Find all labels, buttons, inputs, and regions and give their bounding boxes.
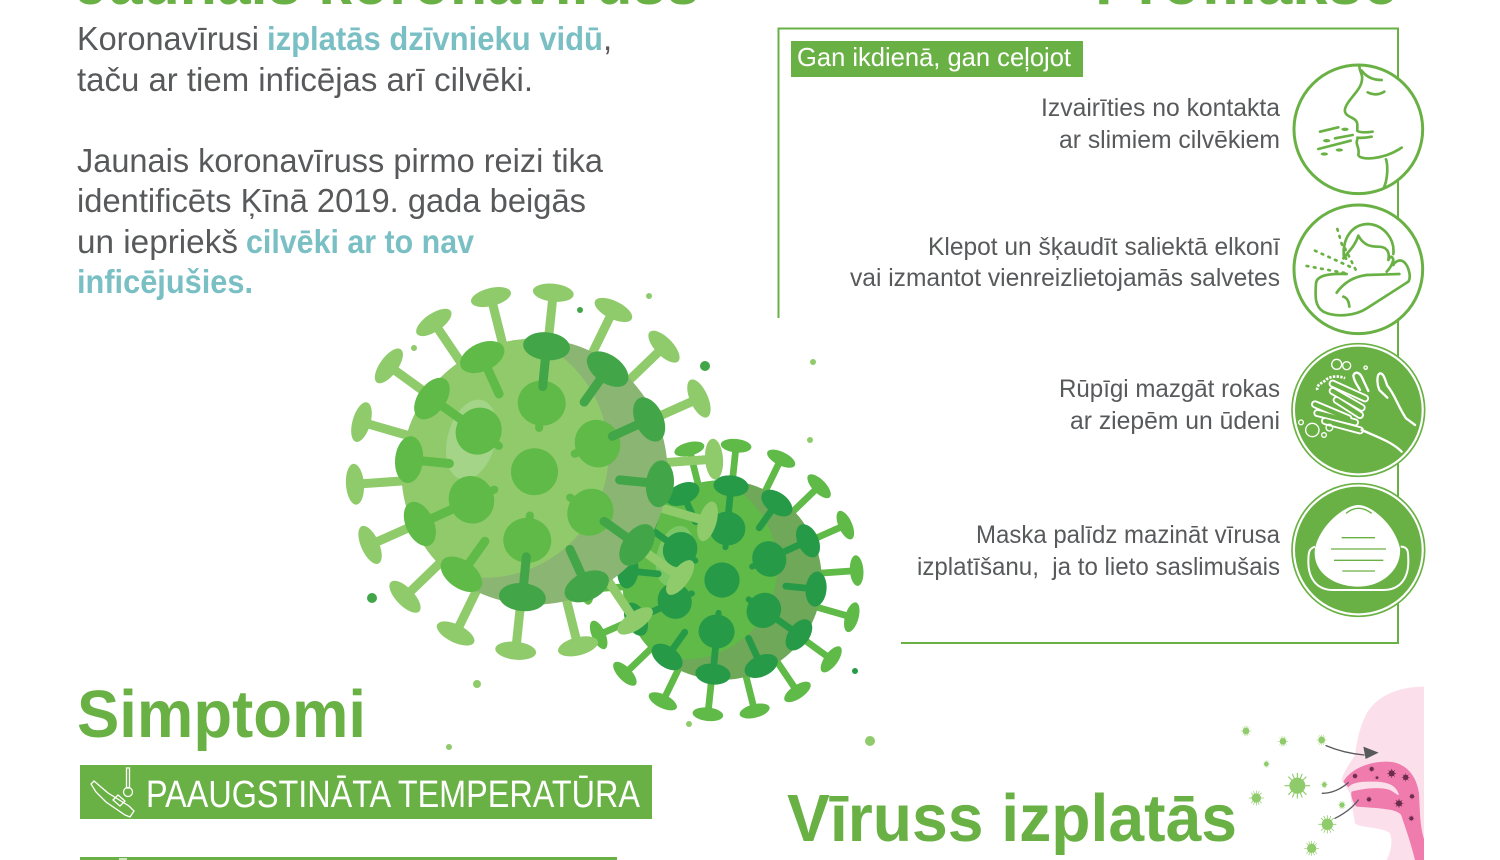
text: avoid contact: ar slimiem cilvēkiem xyxy=(1059,126,1280,154)
text block: origin: Jaunais koronavīruss pirmo reizi tika xyxy=(77,142,604,179)
symptom bar: fever xyxy=(80,765,652,819)
text block: intro: , xyxy=(603,20,612,57)
text block: origin: inficējušies. xyxy=(77,263,253,300)
icon: face breathing xyxy=(1294,65,1423,194)
dark virus particles xyxy=(1352,766,1415,821)
heading: Vīruss izplatās: Vīruss izplatās xyxy=(787,781,1237,856)
nasal and oral passage xyxy=(1343,762,1424,860)
face profile xyxy=(1342,687,1424,860)
text: hand washing: ar ziepēm un ūdeni xyxy=(1070,407,1280,435)
text: cough etiquette: Klepot un šķaudīt saliektā elkonī xyxy=(928,233,1280,261)
text: cough etiquette xyxy=(850,233,1280,292)
decorative virus particles xyxy=(367,293,875,750)
text: avoid contact xyxy=(1041,94,1280,154)
icon: washing hands xyxy=(1292,344,1425,476)
green virus particles xyxy=(1241,726,1346,856)
illustration: airborne transmission into face xyxy=(1241,687,1424,860)
symptom bar: second (cropped) xyxy=(80,857,617,860)
text: avoid contact: Izvairīties no kontakta xyxy=(1041,94,1280,122)
text: hand washing xyxy=(1059,375,1280,435)
text: hand washing: Rūpīgi mazgāt rokas xyxy=(1059,375,1280,403)
text block: intro: izplatās dzīvnieku vidū xyxy=(267,20,603,57)
arrows xyxy=(1322,746,1364,818)
text: mask: Maska palīdz mazināt vīrusa xyxy=(976,521,1280,549)
heading: Simptomi: Simptomi xyxy=(77,677,366,752)
illustration: small coronavirus xyxy=(580,437,864,723)
icon: sneezing into elbow xyxy=(1294,205,1423,334)
symptom bar: fever: PAAUGSTINĀTA TEMPERATŪRA xyxy=(146,774,641,816)
text block: intro: Koronavīrusi xyxy=(77,20,259,57)
text: mask: izplatīšanu, ja to lieto saslimušais xyxy=(917,553,1280,581)
text: cough etiquette: vai izmantot vienreizlietojamās salvetes xyxy=(850,264,1280,292)
illustration: large coronavirus xyxy=(345,282,724,662)
text: mask xyxy=(917,521,1280,581)
icon: thermometer xyxy=(91,768,134,817)
text block: intro xyxy=(77,20,612,98)
text block: origin: un iepriekš xyxy=(77,223,238,260)
text block: origin: cilvēki ar to nav xyxy=(246,223,475,260)
panel: prevention frame xyxy=(778,28,1398,643)
icon: face mask xyxy=(1292,484,1425,616)
text block: origin: identificēts Ķīnā 2019. gada beigās xyxy=(77,182,586,219)
text block: intro: taču ar tiem inficējas arī cilvēki. xyxy=(77,61,533,98)
label: everyday and travelling: Gan ikdienā, gan ceļojot xyxy=(797,42,1072,72)
text block: origin xyxy=(77,142,604,300)
